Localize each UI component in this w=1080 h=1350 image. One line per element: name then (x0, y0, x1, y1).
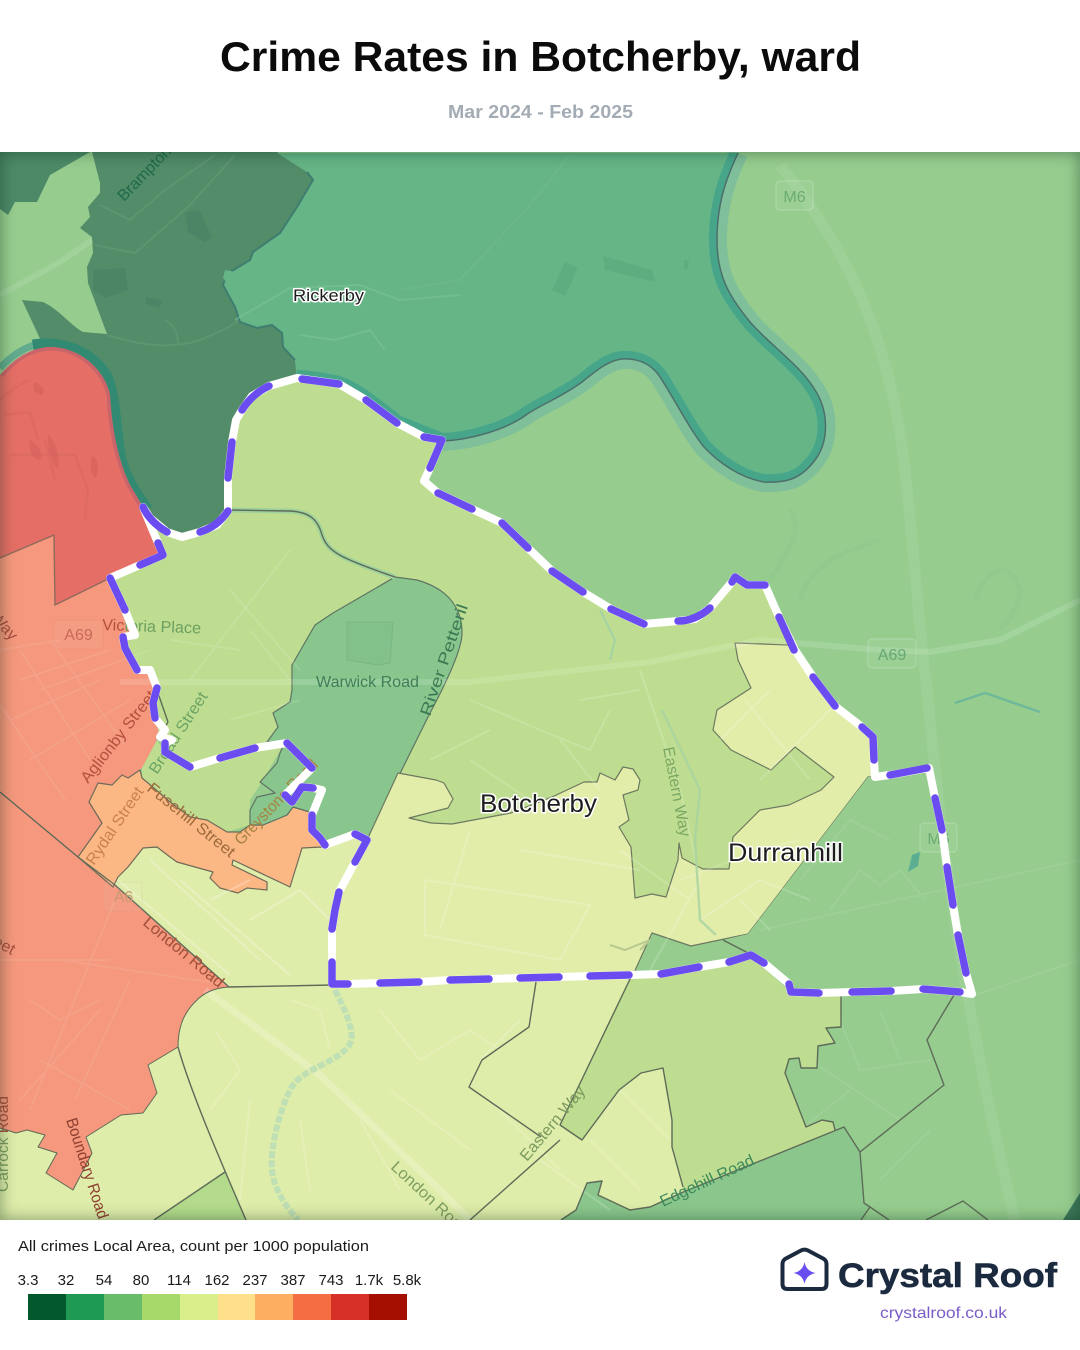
region: green strip below Broad Street (142, 740, 285, 832)
legend scale labels: 114 (167, 1272, 191, 1289)
label: Broad Street: Broad Street (146, 689, 212, 777)
stream in Botcherby (662, 710, 716, 935)
legend scale labels: 237 (242, 1272, 268, 1289)
shield: A6: A6 (114, 889, 133, 906)
region: south green, Edgehill Road (561, 1127, 870, 1220)
label: Warwick Road: Warwick Road (316, 674, 419, 691)
Warwick sports ground (347, 622, 393, 665)
shield: M6 north: M6 (783, 189, 806, 206)
region: dark top-left corner (0, 152, 90, 215)
stream and pond (955, 693, 1040, 712)
legend scale labels: 162 (204, 1272, 230, 1289)
place labels (293, 286, 843, 867)
boundary: white outline (110, 378, 972, 994)
region: south-west pale area (0, 969, 786, 1220)
legend scale labels: 743 (318, 1272, 344, 1289)
website link text: crystalroof.co.uk (880, 1305, 1008, 1322)
legend title: All crimes Local Area, count per 1000 population (18, 1238, 369, 1255)
minor roads (0, 640, 230, 1110)
legend scale labels: 80 (133, 1272, 149, 1289)
shield: M6 south: M6 (927, 831, 950, 848)
logo: Crystal Roof (782, 1250, 1058, 1322)
corner dark patch (1063, 1193, 1080, 1220)
legend scale labels: 32 (58, 1272, 74, 1289)
shield: A69 west (64, 629, 92, 640)
label: Eastern Way: Eastern Way (659, 746, 693, 838)
shield: M6 south (920, 823, 957, 852)
label: London Road north: London Road (139, 914, 227, 991)
label: Edgehill Road: Edgehill Road (658, 1152, 757, 1211)
shield: A69 east: A69 (878, 647, 906, 664)
label: Greystone Road: Greystone Road (232, 756, 322, 849)
forest details (93, 210, 212, 307)
region: ward base mid green (116, 382, 833, 898)
map base: east green area (0, 152, 1080, 1220)
ward boundary (110, 378, 972, 994)
legend scale labels: 1.7k (355, 1272, 384, 1289)
title: Crime Rates in Botcherby, ward (220, 33, 861, 80)
legend scale labels: 3.3 (18, 1272, 38, 1289)
legend scale labels: 54 (96, 1272, 112, 1289)
shield: A6 (105, 882, 142, 910)
wordmark: Crystal Roof (838, 1257, 1058, 1295)
legend scale labels: 5.8k (393, 1272, 422, 1289)
forest paths (95, 154, 238, 346)
region: peach Fusehill Street (78, 770, 322, 893)
region: salmon city centre (0, 535, 229, 1190)
label: London Road south: London Road (387, 1158, 472, 1239)
region: Rickerby teal green (223, 153, 826, 482)
label: Fusehill Street: Fusehill Street (143, 780, 239, 861)
shield: M6 north (776, 181, 813, 210)
region: south-west mid green (154, 1172, 246, 1220)
shield: A69 east (868, 639, 916, 668)
canal path (272, 990, 352, 1220)
road shields (54, 181, 957, 910)
legend scale labels: 387 (280, 1272, 306, 1289)
boundary lines (0, 510, 988, 1220)
label: Brampton: Brampton Road (115, 112, 205, 205)
label: Botcherby: Botcherby (480, 790, 598, 818)
legend (18, 1238, 422, 1320)
label: Rydal Street: Rydal Street (83, 784, 148, 868)
label: Aglionby Street: Aglionby Street (78, 687, 160, 786)
label: Durranhill: Durranhill (728, 839, 843, 867)
label: Rickerby: Rickerby (293, 286, 365, 305)
label: Boundary Road: Boundary Road (62, 1116, 111, 1221)
region: pale area north of London Road (115, 838, 362, 986)
river halo: Rickerby (442, 152, 836, 492)
label: Victoria Place: Victoria Place (102, 617, 201, 637)
region: south mid green, Edgehill (560, 957, 844, 1193)
region: Durranhill east green (724, 777, 871, 940)
road and river labels (0, 112, 757, 1239)
shield: A69 west: A69 (64, 627, 93, 644)
boundary: purple dashes (110, 379, 966, 993)
label: River Petteril: River Petteril (418, 602, 472, 718)
icon: house with star (782, 1250, 826, 1289)
region: red area (0, 343, 163, 605)
legend colour bar (28, 1294, 407, 1320)
legend scale labels (18, 1272, 422, 1289)
region: light central Botcherby and Durranhill (332, 643, 875, 984)
region: Warwick Road green (250, 577, 462, 845)
label: Eastern Way south: Eastern Way (517, 1083, 589, 1165)
region: forest dark green (22, 152, 313, 537)
subtitle: date range: Mar 2024 - Feb 2025 (448, 102, 633, 122)
